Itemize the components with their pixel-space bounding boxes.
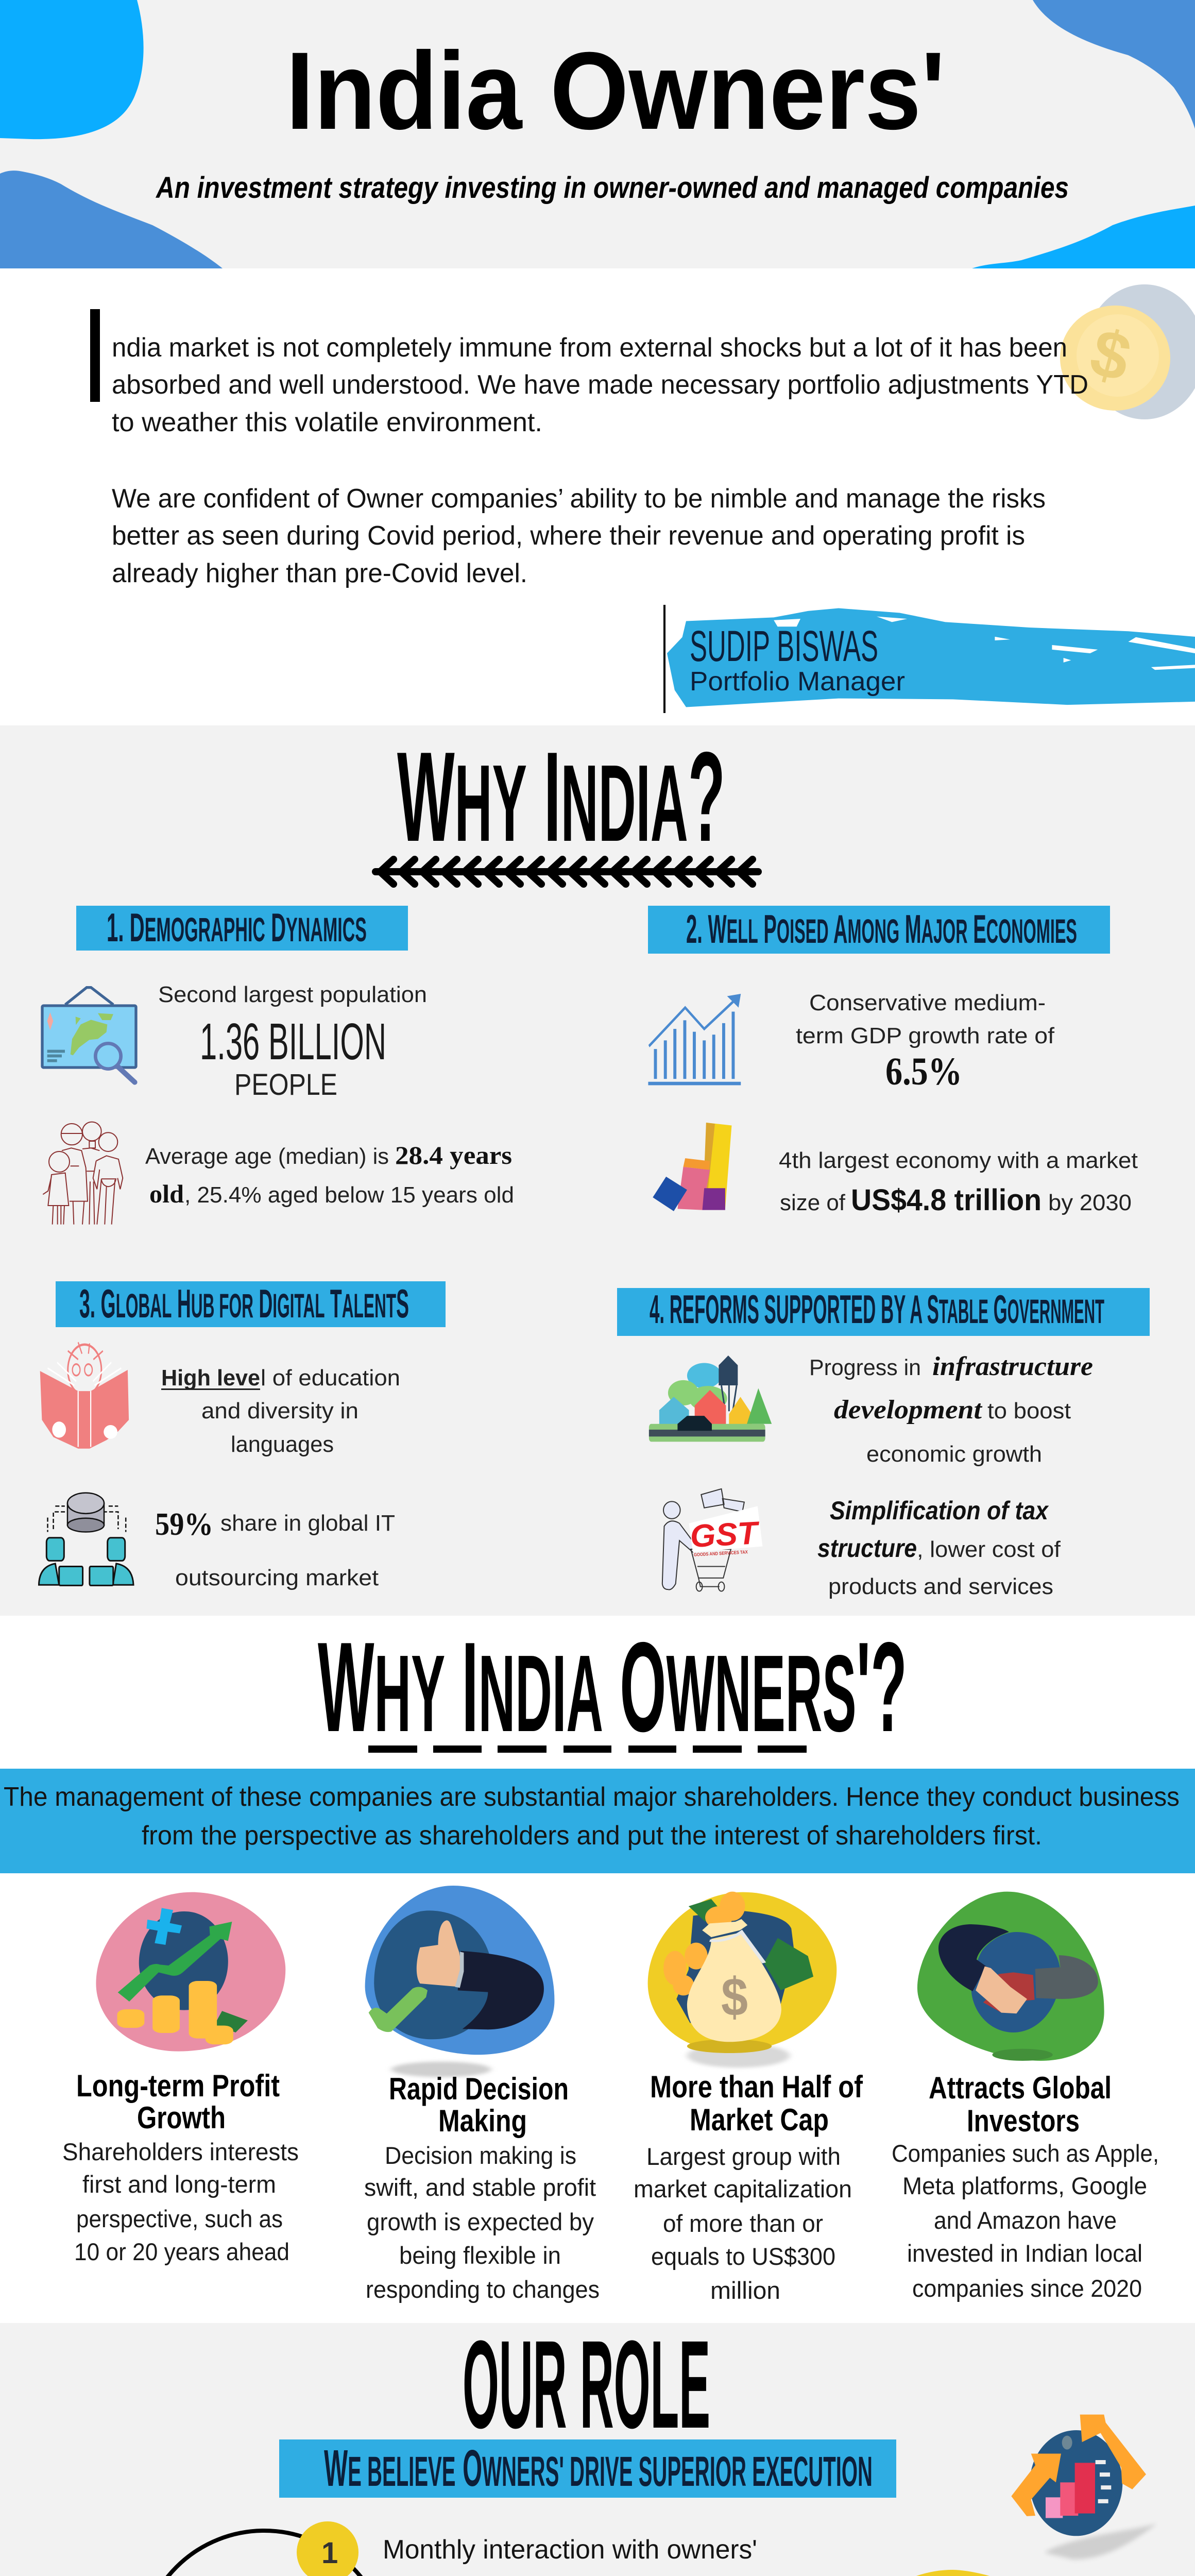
text block: global investors: Companies such as Apple,	[892, 2140, 1159, 2167]
icon: growth chart	[648, 994, 741, 1085]
text block: GDP growth	[796, 990, 1055, 1093]
text block: education: l of education	[261, 1365, 400, 1391]
icon: money bag: $	[721, 1967, 748, 2027]
text block: intro paragraph two: better as seen during Covid period, where their revenue and operating profit is	[112, 521, 1025, 551]
text block: global investors: companies since 2020	[912, 2275, 1142, 2302]
text block: market size: by 2030	[1048, 1190, 1132, 1215]
text block: intro paragraph two: already higher than pre-Covid level.	[112, 558, 527, 588]
text block: GDP growth: Conservative medium-	[809, 990, 1046, 1015]
text block: IT outsourcing share: outsourcing market	[175, 1565, 379, 1590]
step 1 marker: 1	[321, 2536, 338, 2570]
icon: wall map	[42, 988, 136, 1082]
text block: average age: old	[149, 1179, 184, 1208]
text block: global investors: Investors	[967, 2104, 1080, 2138]
text block: IT outsourcing share	[155, 1507, 395, 1590]
text block: global investors: Meta platforms, Google	[902, 2172, 1147, 2199]
panel: introduction	[90, 284, 1195, 713]
text block: IT outsourcing share: 59%	[155, 1507, 213, 1542]
text block: population: PEOPLE	[234, 1068, 337, 1101]
text block: rapid decision making	[364, 2072, 600, 2303]
icon: rising bar chart	[1011, 2415, 1157, 2560]
text block: intro paragraph one: to weather this volatile environment.	[112, 408, 542, 437]
text block: infrastructure: Progress in	[809, 1355, 921, 1380]
sub-heading: well poised: 2. WELL POISED AMONG MAJOR ECONOMIES	[686, 906, 1077, 952]
icon: money bag	[648, 1892, 836, 2067]
text block: long-term profit growth	[62, 2069, 299, 2265]
banner: management statement	[0, 1769, 1195, 1873]
diagram: three-step ring	[87, 2521, 417, 2576]
author signature	[663, 605, 1195, 713]
text block: market cap: More than Half of	[650, 2070, 863, 2104]
text block: average age: Average age (median) is	[145, 1144, 389, 1169]
text block: education: languages	[231, 1432, 334, 1457]
banner: management statement: from the perspective as shareholders and put the interest of shareholders first.	[142, 1821, 1042, 1851]
text block: long-term profit growth: first and long-term	[82, 2171, 276, 2198]
text block: long-term profit growth: perspective, such as	[76, 2205, 283, 2232]
text block: infrastructure: infrastructure	[932, 1352, 1093, 1381]
text block: average age: 28.4 years	[395, 1141, 512, 1170]
text block: infrastructure	[809, 1352, 1093, 1467]
icon: handshake	[917, 1892, 1104, 2061]
text block: rapid decision making: being flexible in	[399, 2242, 561, 2269]
text block: population	[158, 982, 427, 1101]
text block: tax simplification: products and services	[828, 1574, 1053, 1599]
text block: infrastructure: to boost	[987, 1398, 1071, 1423]
text block: rapid decision making: responding to changes	[366, 2276, 600, 2303]
text block: population: 1.36 BILLION	[200, 1013, 386, 1071]
text block: market cap: market capitalization	[634, 2175, 852, 2202]
text block: market size: 4th largest economy with a market	[779, 1148, 1138, 1173]
text block: GDP growth: term GDP growth rate of	[796, 1023, 1055, 1048]
title: India Owners'	[286, 29, 945, 152]
text block: average age	[145, 1141, 514, 1208]
text block: education	[161, 1365, 400, 1457]
panel: why India Owners	[0, 1615, 1195, 2304]
text block: global investors	[892, 2071, 1159, 2302]
step 1 marker	[297, 2521, 358, 2576]
text block: intro paragraph two: We are confident of Owner companies’ ability to be nimble and manage the risks	[112, 484, 1046, 514]
text block: intro paragraph one	[112, 333, 1088, 437]
text block: infrastructure: economic growth	[866, 1442, 1042, 1467]
author signature: SUDIP BISWAS	[690, 622, 878, 670]
text block: intro paragraph one: absorbed and well understood. We have made necessary portfolio adjustments YTD	[112, 370, 1088, 400]
text block: intro paragraph one: ndia market is not completely immune from external shocks but a lot of it has been	[112, 333, 1067, 363]
text block: global investors: Attracts Global	[929, 2071, 1112, 2105]
icon: long-term profit growth	[96, 1892, 285, 2052]
text block: tax simplification	[817, 1496, 1061, 1599]
text block: long-term profit growth: 10 or 20 years ahead	[74, 2238, 289, 2265]
text block: market size: size of	[780, 1190, 846, 1215]
text block: IT outsourcing share: share in global IT	[220, 1511, 395, 1536]
text block: tax simplification: Simplification of tax	[830, 1496, 1049, 1525]
dashed underline	[368, 1745, 807, 1753]
panel: header banner	[0, 0, 1195, 268]
sub-heading: global hub: 3. GLOBAL HUB FOR DIGITAL TALENTS	[79, 1281, 409, 1326]
text block: GDP growth: 6.5%	[885, 1050, 962, 1093]
icon: rapid decision making	[365, 1886, 554, 2077]
text block: rapid decision making: Making	[438, 2104, 527, 2138]
text block: market cap: Largest group with	[646, 2143, 841, 2170]
panel: why India	[0, 725, 1195, 1616]
icon: stacked blocks	[653, 1123, 731, 1211]
text block: market cap: equals to US$300	[651, 2243, 835, 2270]
author signature: Portfolio Manager	[690, 667, 905, 697]
icon: gold coin	[1060, 284, 1195, 419]
text block: rapid decision making: Decision making is	[385, 2142, 576, 2169]
text block: average age: , 25.4% aged below 15 years old	[184, 1182, 514, 1208]
text block: rapid decision making: growth is expected by	[367, 2208, 594, 2235]
text block: long-term profit growth: Shareholders interests	[62, 2138, 299, 2165]
heading: why India Owners: WHY INDIA OWNERS'?	[318, 1615, 907, 1758]
icon: IT outsourcing	[39, 1493, 133, 1585]
text block: market cap: of more than or	[663, 2210, 823, 2237]
panel: our role	[0, 2315, 1195, 2576]
text block: tax simplification: structure	[817, 1534, 917, 1563]
icon: GST shopper	[662, 1489, 762, 1591]
text block: global investors: invested in Indian local	[907, 2240, 1142, 2267]
quote bar	[90, 309, 100, 402]
text block: market cap: million	[710, 2277, 780, 2304]
text block: long-term profit growth: Growth	[137, 2100, 226, 2135]
text block: market size	[779, 1148, 1138, 1217]
text block: rapid decision making: swift, and stable profit	[364, 2174, 596, 2201]
text block: tax simplification: , lower cost of	[917, 1537, 1061, 1562]
panel: our role: OUR ROLE	[463, 2315, 710, 2454]
text block: rapid decision making: Rapid Decision	[389, 2072, 569, 2106]
text block: steps: Monthly interaction with owners'	[383, 2535, 757, 2565]
icon: town infrastructure	[649, 1355, 772, 1442]
icon: gold coin: $	[1083, 314, 1138, 396]
text block: education: High leve	[161, 1365, 260, 1391]
sub-heading: owners drive execution	[279, 2439, 896, 2498]
yellow backdrop	[844, 2570, 1195, 2576]
arrow divider	[375, 859, 758, 884]
icon: GST shopper: GST	[689, 1515, 761, 1554]
subtitle: An investment strategy investing in owner-owned and managed companies	[155, 171, 1069, 205]
text block: market cap: Market Cap	[690, 2103, 829, 2137]
text block: population: Second largest population	[158, 982, 427, 1007]
icon: GST shopper: GOODS AND SERVICES TAX	[694, 1549, 748, 1557]
text block: education: and diversity in	[201, 1398, 358, 1423]
text block: intro paragraph two	[112, 484, 1046, 588]
text block: long-term profit growth: Long-term Profit	[76, 2069, 280, 2103]
sub-heading: demographic dynamics: 1. DEMOGRAPHIC DYNAMICS	[107, 905, 367, 950]
heading: why India: WHY INDIA?	[397, 725, 725, 868]
text block: infrastructure: development	[834, 1395, 983, 1425]
text block: market size: US$4.8 trillion	[851, 1183, 1042, 1217]
text block: market cap	[634, 2070, 863, 2304]
icon: family	[43, 1122, 123, 1225]
icon: reader with book	[40, 1342, 129, 1449]
text block: global investors: and Amazon have	[934, 2207, 1117, 2234]
